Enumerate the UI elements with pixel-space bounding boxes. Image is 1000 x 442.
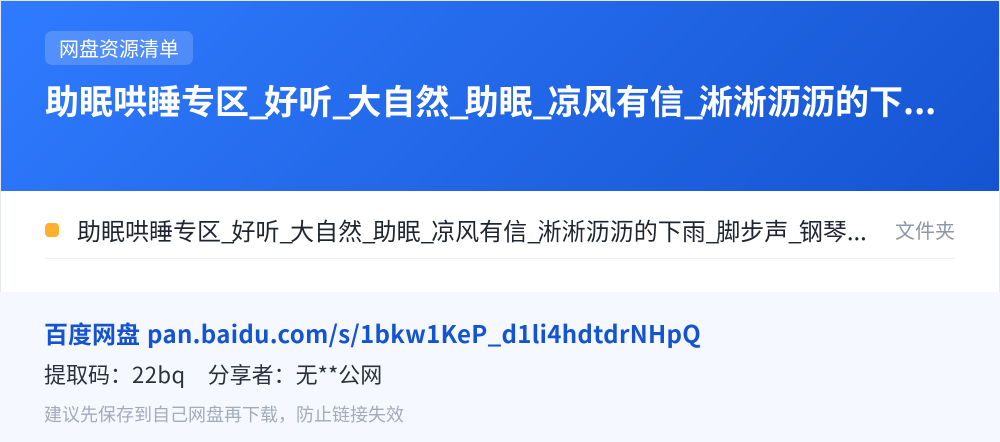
panel: footer	[0, 292, 1000, 442]
note: 建议先保存到自己网盘再下载，防止链接失效	[44, 401, 404, 427]
title: 助眠哄睡专区_好听_大自然_助眠_凉风有信_淅淅沥沥的下...	[45, 75, 936, 124]
badge: 网盘资源清单	[59, 33, 179, 62]
file type: 文件夹	[895, 215, 955, 244]
divider	[45, 258, 955, 259]
panel: header	[1, 1, 999, 191]
panel: file list	[1, 191, 999, 292]
badge	[45, 31, 193, 65]
icon: folder marker	[45, 223, 59, 237]
file name: 助眠哄睡专区_好听_大自然_助眠_凉风有信_淅淅沥沥的下雨_脚步声_钢琴...	[77, 212, 867, 247]
link: 百度网盘 pan.baidu.com/s/1bkw1KeP_d1li4hdtdrNHpQ	[44, 315, 701, 350]
extraction code and sharer: 提取码：22bq 分享者：无**公网	[44, 358, 382, 390]
